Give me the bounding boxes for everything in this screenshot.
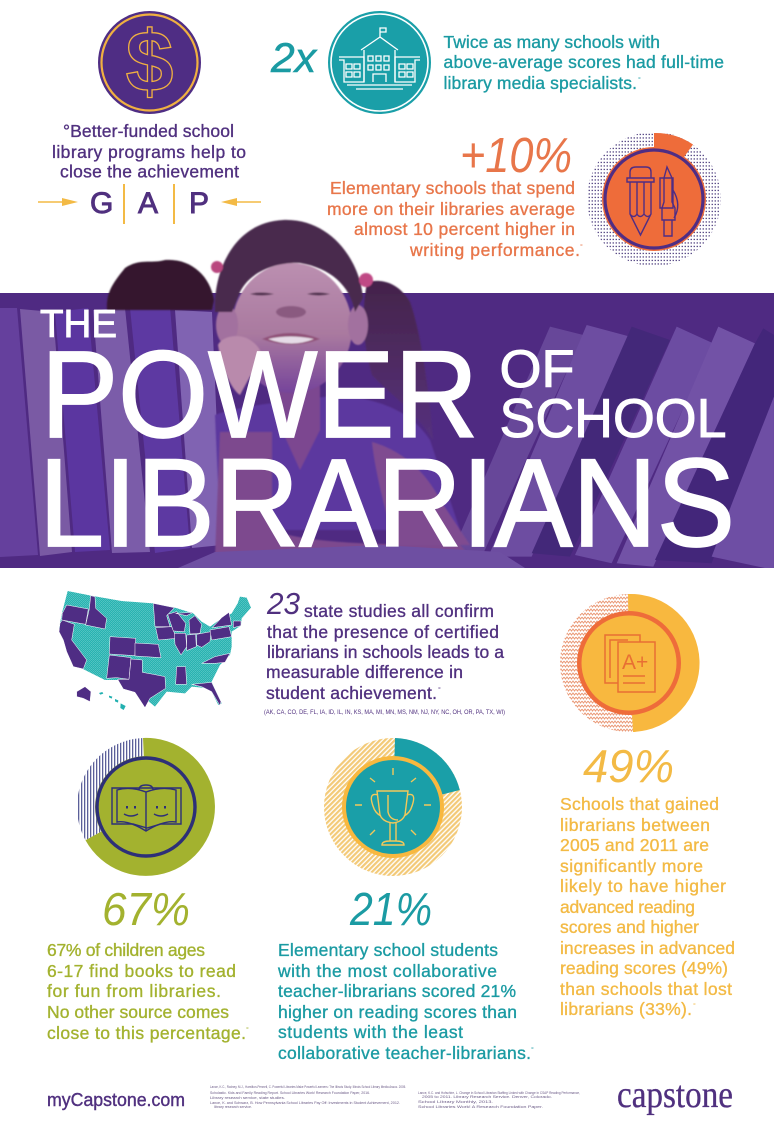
text: better-funded programs [52,121,246,182]
stat: 49%: 49% [583,740,674,792]
text: schools that gained librarians [560,794,735,1019]
text: schools that gained librarians: librarians (33%). [560,999,692,1019]
text: 67 percent of children: for fun from libraries. [47,981,221,1001]
icon: graded paper: A+ [622,651,648,674]
panel: purple band [0,293,774,568]
face [232,263,352,393]
text: 67 percent of children: 6-17 find books to read [47,961,236,981]
footer: sources left: Lance, K. and Schwarz, B. How Pennsylvania School Libraries Pay Off: Investments in Student Achievement, 2012. [210,1101,400,1105]
stat: 23 state studies: student achievement. [266,683,437,703]
text: 67 percent of children: ° [246,1026,249,1034]
text: 67 percent of children: No other source comes [47,1002,229,1022]
text: elementary collaborative: higher on reading scores than [278,1002,517,1022]
hair [215,220,363,312]
title: POWER [41,327,478,464]
footer: sources left: library research service. [214,1105,252,1109]
text: twice as many schools: library media specialists. [444,73,637,93]
text: schools that gained librarians: 2005 and 2011 are [560,835,709,855]
text: better-funded programs: °Better-funded school [63,121,234,141]
footer: sources right [418,1091,580,1109]
footer: sources right: 2005 to 2011. Library Research Service. Denver, Colorado. [422,1095,552,1099]
footer: sources right: School Library Monthly, 2013. [418,1100,493,1104]
stat: 23 state studies [264,586,505,716]
stat: 23 state studies: state studies all confirm [304,601,494,621]
text: twice as many schools: Twice as many schools with [444,32,660,52]
text: schools that gained librarians: than schools that lost [560,979,732,999]
text: elementary schools writing: more on their libraries average [327,199,575,219]
donut: 49 percent [560,594,700,732]
text: schools that gained librarians: likely to have higher [560,876,726,896]
footer: sources left [210,1085,406,1109]
footer: sources left: Library research service, state studies. [210,1096,285,1100]
text: schools that gained librarians: reading scores (49%) [560,958,728,978]
stat: 23 state studies: ° [438,686,441,694]
icon: smiling book [112,785,181,831]
open book [178,545,525,568]
gap graphic: P [189,187,209,220]
text: elementary collaborative: with the most collaborative [277,961,497,981]
donut: 21 percent [324,738,462,876]
hero banner [0,220,774,573]
stat: 23 state studies: (AK, CA, CO, DE, FL, IA, ID, IL, IN, KS, MA, MI, MN, MS, NM, NJ, NY, NC, OH, OR, PA, TX, WI) [264,710,505,716]
text: elementary schools writing: ° [580,243,583,251]
gap graphic: G [90,187,113,220]
gap graphic: A [138,187,158,220]
neck [272,375,320,470]
text: elementary schools writing [327,178,583,260]
footer: sources right: Lance, K.C. and Hofschire, L. Change in School Librarian Staffing Linked with Change in CSAP Reading Performance, [418,1091,580,1095]
text: elementary collaborative [277,940,534,1063]
page margin below banner [0,568,774,574]
donut: 67 percent [77,738,215,876]
title [39,303,735,573]
text: schools that gained librarians: Schools that gained [560,794,719,814]
text: elementary collaborative: students with the least [278,1022,463,1042]
right books [452,325,774,570]
text: better-funded programs: close the achievement [60,162,239,182]
title: THE [40,303,117,346]
stat: 2x: 2x [270,34,318,81]
stat: 23 state studies: that the presence of certified [267,622,499,642]
text: twice as many schools: above-average scores had full-time [444,52,724,72]
stat: 21%: 21% [349,883,432,935]
girl photo [107,220,470,556]
text: elementary schools writing: Elementary schools that spend [330,178,575,198]
stat: 67%: 67% [102,883,190,935]
text: schools that gained librarians: librarians between [560,815,710,835]
text: twice as many schools [444,32,724,93]
left books [0,307,222,557]
text: schools that gained librarians: scores and higher [560,917,699,937]
text: 67 percent of children [47,940,249,1043]
gap graphic [38,184,261,224]
text: elementary collaborative: ° [531,1046,534,1054]
footer: sources left: Scholastic. Kids and Family Reading Report. School Libraries Work! Research Foundation Paper, 2016. [210,1091,370,1095]
mouth [262,333,320,344]
text: 67 percent of children: 67% of children ages [47,940,205,960]
map of US states [59,591,251,710]
text: elementary collaborative: Elementary school students [278,940,498,960]
text: schools that gained librarians: increases in advanced [560,938,735,958]
stat: 23 state studies: measurable difference in [266,662,463,682]
nose [276,306,306,318]
icon: dollar coin [98,11,201,114]
text: twice as many schools: ° [638,76,641,84]
hand [218,336,262,395]
stat: 23 state studies: 23 [266,586,300,621]
stat: +10%: +10% [460,129,572,183]
right ponytail [364,281,433,440]
icon: school [328,11,431,114]
text: better-funded programs: library programs help to [52,142,246,162]
shirt [215,395,460,530]
text: schools that gained librarians: ° [693,1002,696,1010]
title: SCHOOL [500,387,726,449]
arms [215,432,470,556]
title: LIBRARIANS [39,434,735,573]
text: elementary collaborative: teacher-librarians scored 21% [278,981,516,1001]
icon: dollar coin: $ [126,14,173,110]
icon: pencil and crayon donut [587,132,721,266]
stat: 23 state studies: librarians in schools leads to a [267,642,504,662]
text: elementary schools writing: almost 10 percent higher in [354,219,575,239]
eyes [250,292,330,296]
icon: trophy [355,768,431,845]
footer: website: myCapstone.com [47,1090,185,1110]
left ponytail [107,260,214,310]
text: elementary schools writing: writing performance. [409,240,580,260]
title: OF [500,340,574,399]
text: elementary collaborative: collaborative teacher-librarians. [278,1043,531,1063]
text: 67 percent of children: close to this percentage. [47,1023,246,1043]
text: schools that gained librarians: advanced reading [560,897,695,917]
footer: sources left: Lance, K.C., Rodney, M.J., Hamilton-Pennell, C. Powerful Libraries Make Powerful Learners: The Illinois Study. Illinois School Library Media Assoc. 2005. [210,1085,406,1089]
logo: capstone: capstone [617,1074,733,1116]
text: schools that gained librarians: significantly more [560,856,703,876]
footer: sources right: School Libraries Work! A Research Foundation Paper. [418,1105,543,1109]
hair ties [211,261,223,273]
